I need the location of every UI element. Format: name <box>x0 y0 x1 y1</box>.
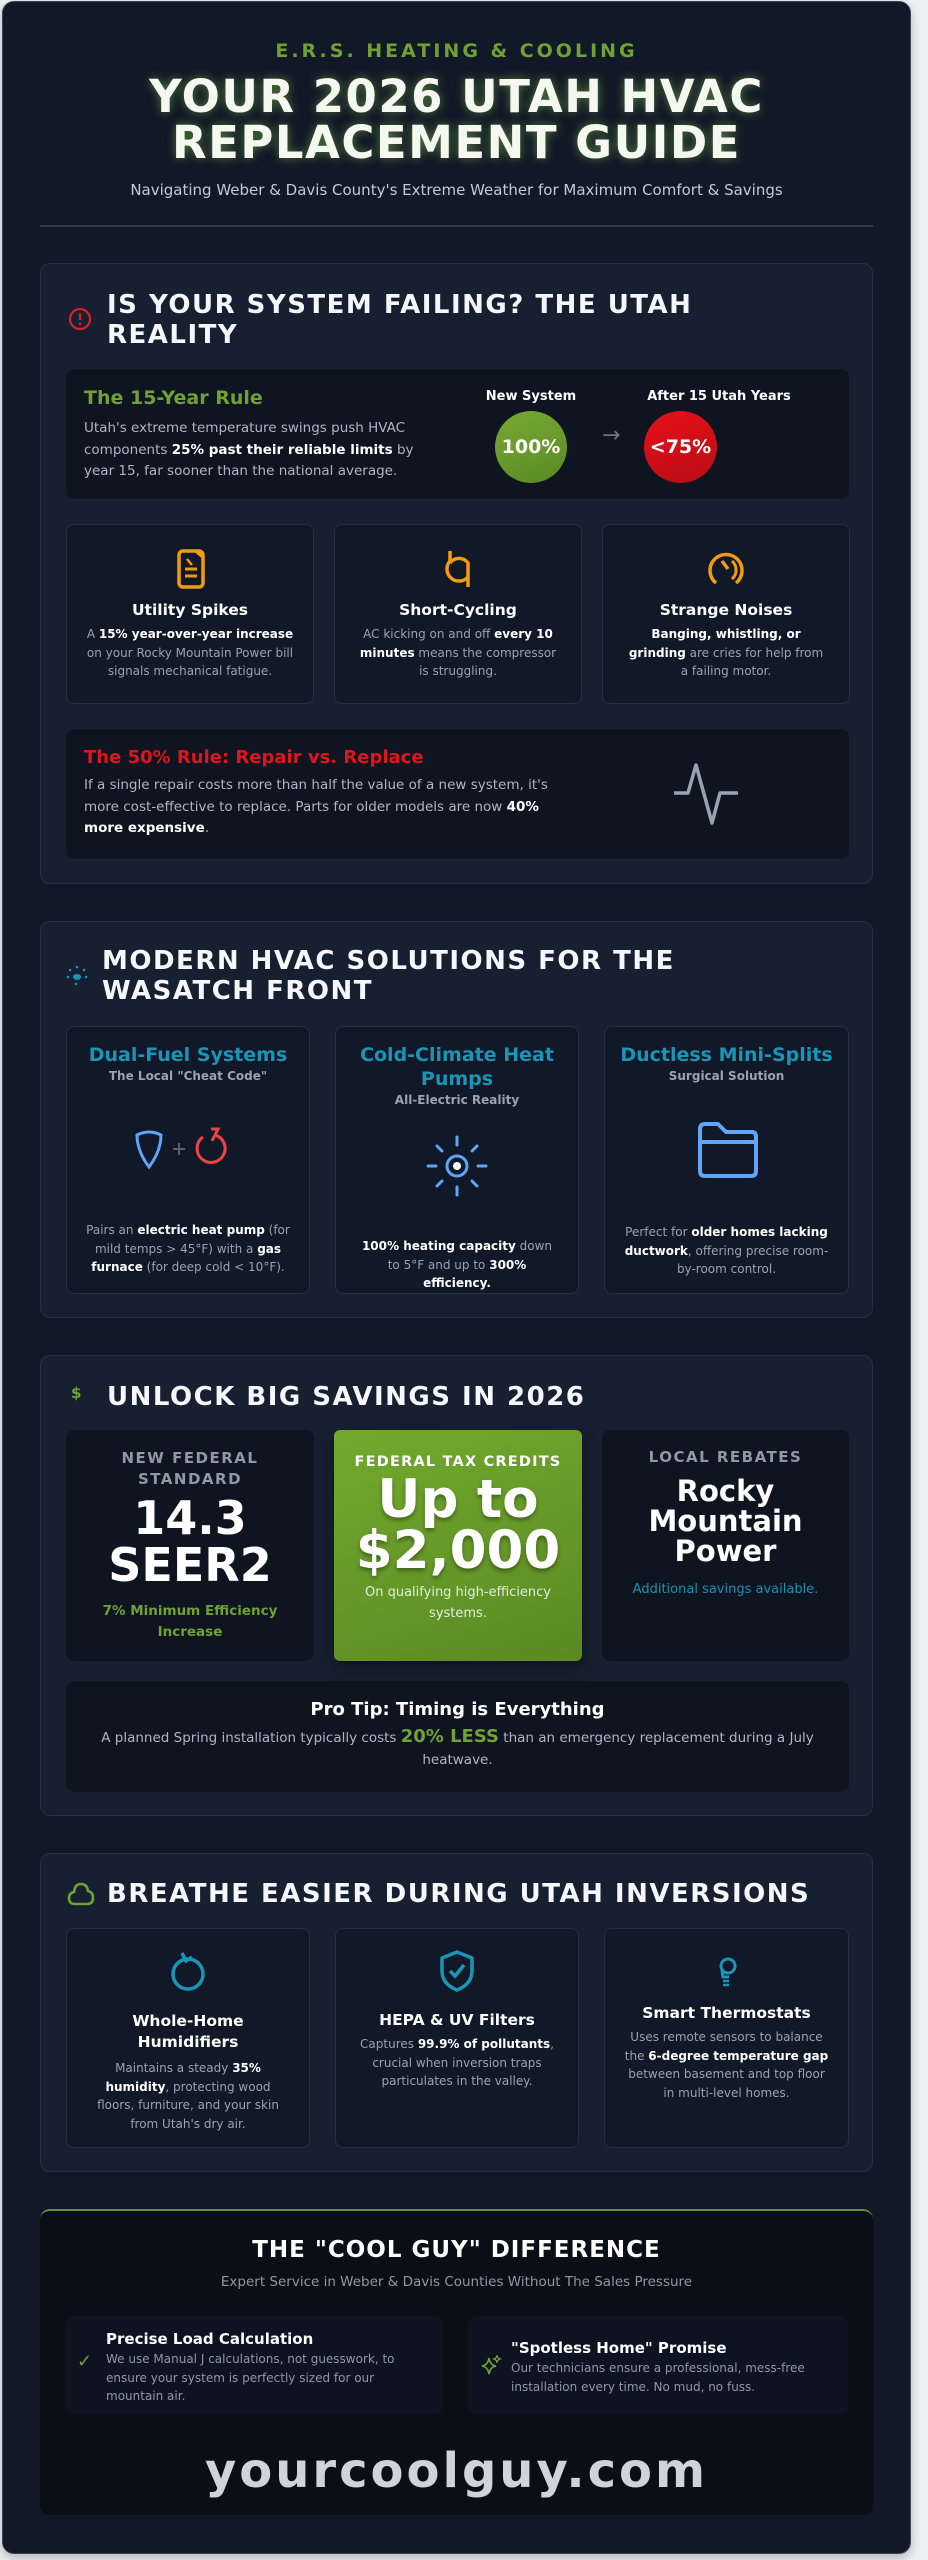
card: dual-fuel: The Local "Cheat Code" <box>109 1069 267 1083</box>
card: thermostats <box>604 1928 849 2148</box>
feature: load calculation: We use Manual J calculations, not guesswork, to ensure your system is perfectly sized for our mountain air. <box>106 2352 395 2403</box>
card: tax credits: On qualifying high-efficiency <box>365 1585 551 1600</box>
card: dual-fuel: Dual-Fuel Systems <box>89 1044 287 1066</box>
card: cold-climate heat pumps: Cold-Climate Heat Pumps <box>360 1044 554 1090</box>
card: dual-fuel <box>66 1026 310 1294</box>
50% rule box <box>66 729 849 859</box>
feature: spotless home <box>468 2316 848 2414</box>
card: strange noises <box>602 524 850 704</box>
card: HEPA: HEPA & UV Filters <box>379 2011 535 2029</box>
card: federal standard: NEW FEDERAL <box>122 1449 258 1467</box>
15-year rule box <box>66 369 849 499</box>
chart: after 15 years: <75% <box>650 436 711 458</box>
15-year rule box: Utah's extreme temperature swings push HVAC components 25% past their reliable limits by year 15, far sooner than the national average. <box>84 420 414 479</box>
card: cold-climate heat pumps <box>335 1026 579 1294</box>
card: federal standard: Increase <box>158 1624 222 1640</box>
card: tax credits <box>334 1430 582 1661</box>
panel: breathe easier <box>40 1853 873 2172</box>
panel: modern solutions <box>40 921 873 1318</box>
card: humidifiers: Whole-Home <box>132 2012 244 2030</box>
card: federal standard <box>66 1430 314 1661</box>
card: ductless: Surgical Solution <box>669 1069 784 1083</box>
website url: yourcoolguy.com <box>205 2443 708 2499</box>
card: ductless <box>604 1026 849 1294</box>
subtitle: Navigating Weber & Davis County's Extreme Weather for Maximum Comfort & Savings <box>130 181 783 199</box>
card: short-cycling: Short-Cycling <box>399 601 517 619</box>
title: YOUR 2026 UTAH HVAC <box>149 70 764 123</box>
panel: savings <box>40 1355 873 1816</box>
arrow: → <box>602 423 620 448</box>
card: thermostats: Uses remote sensors to balance the 6-degree temperature gap between basement and top floor in multi-level homes. <box>625 2030 828 2100</box>
card: HEPA: Captures 99.9% of pollutants, crucial when inversion traps particulates in the valley. <box>360 2037 554 2088</box>
pro tip: Pro Tip: Timing is Everything <box>310 1699 605 1720</box>
card: local rebates: Rocky <box>677 1474 774 1508</box>
card: federal standard: SEER2 <box>108 1538 272 1592</box>
card: utility spikes <box>66 524 314 704</box>
feature: spotless home: "Spotless Home" Promise <box>511 2339 726 2357</box>
50% rule box: The 50% Rule: Repair vs. Replace <box>84 747 424 768</box>
card: tax credits: systems. <box>429 1606 487 1621</box>
title: REPLACEMENT GUIDE <box>172 116 741 169</box>
chart: after 15 years <box>644 389 791 483</box>
icon: dollar: $ <box>71 1384 81 1402</box>
feature: load calculation: ✓ <box>77 2351 92 2372</box>
card: cold-climate heat pumps: 100% heating capacity down to 5°F and up to 300% efficiency. <box>362 1239 552 1290</box>
card: cold-climate heat pumps: All-Electric Reality <box>395 1093 519 1107</box>
chart: new system: New System <box>486 389 576 404</box>
feature: spotless home: Our technicians ensure a professional, mess-free installation every time. No mud, no fuss. <box>511 2361 805 2394</box>
card: local rebates: Mountain <box>648 1504 803 1538</box>
pro tip: A planned Spring installation typically costs 20% LESS than an emergency replacement during a July heatwave. <box>101 1726 814 1768</box>
header brand: E.R.S. HEATING & COOLING <box>275 40 638 62</box>
card: federal standard: 14.3 <box>133 1491 247 1545</box>
chart: after 15 years: After 15 Utah Years <box>647 389 791 404</box>
title <box>146 70 764 169</box>
card: federal standard: 7% Minimum Efficiency <box>103 1603 277 1619</box>
card: thermostats: Smart Thermostats <box>642 2004 811 2022</box>
card: utility spikes: Utility Spikes <box>132 601 248 619</box>
feature: load calculation: Precise Load Calculation <box>106 2330 313 2348</box>
icon: pulse <box>674 763 738 825</box>
footer subtitle: Expert Service in Weber & Davis Counties Without The Sales Pressure <box>221 2274 692 2290</box>
card: utility spikes: A 15% year-over-year increase on your Rocky Mountain Power bill signals mechanical fatigue. <box>87 627 293 678</box>
card: tax credits: $2,000 <box>356 1520 560 1581</box>
panel: is your system failing <box>40 263 873 884</box>
heading: UNLOCK BIG SAVINGS IN 2026 <box>107 1382 585 1412</box>
heading: BREATHE EASIER DURING UTAH INVERSIONS <box>107 1879 810 1909</box>
chart: new system <box>486 389 576 483</box>
card: humidifiers: Maintains a steady 35% humidity, protecting wood floors, furniture, and your skin from Utah's dry air. <box>97 2061 279 2130</box>
icon: sparkle <box>66 966 88 986</box>
heading: REALITY <box>107 320 238 350</box>
50% rule box: If a single repair costs more than half the value of a new system, it's more cost-effective to replace. Parts for older models are now 40% more expensive. <box>84 777 548 836</box>
card: local rebates: LOCAL REBATES <box>649 1448 802 1466</box>
heading <box>102 946 675 1006</box>
heading: WASATCH FRONT <box>102 976 373 1006</box>
card: humidifiers: Humidifiers <box>138 2033 238 2051</box>
card: tax credits: Up to <box>377 1469 539 1530</box>
card: ductless: Perfect for older homes lacking ductwork, offering precise room-by-room control. <box>625 1225 828 1276</box>
card: strange noises: Banging, whistling, or grinding are cries for help from a failing motor. <box>629 627 823 678</box>
card: HEPA <box>335 1928 579 2148</box>
card: tax credits: FEDERAL TAX CREDITS <box>355 1454 561 1470</box>
heading: MODERN HVAC SOLUTIONS FOR THE <box>102 946 675 976</box>
feature: load calculation <box>65 2316 443 2414</box>
pro tip <box>66 1681 849 1792</box>
icon: cloud <box>68 1882 94 1906</box>
card: local rebates: Additional savings available. <box>633 1582 818 1597</box>
card: humidifiers <box>66 1928 310 2148</box>
card: local rebates: Power <box>675 1534 776 1568</box>
card: short-cycling: AC kicking on and off every 10 minutes means the compressor is struggling. <box>360 627 556 678</box>
15-year rule box: The 15-Year Rule <box>84 387 263 409</box>
chart: new system: 100% <box>502 436 560 458</box>
footer panel: cool guy difference <box>40 2209 873 2515</box>
card: ductless: Ductless Mini-Splits <box>620 1044 833 1066</box>
card: federal standard: STANDARD <box>138 1470 242 1488</box>
heading <box>107 290 692 350</box>
card: strange noises: Strange Noises <box>660 601 792 619</box>
icon: alert <box>68 308 92 330</box>
card: dual-fuel: Pairs an electric heat pump (for mild temps > 45°F) with a gas furnace (for deep cold < 10°F). <box>86 1223 290 1274</box>
card: local rebates <box>602 1430 849 1661</box>
card: short-cycling <box>334 524 582 704</box>
heading: IS YOUR SYSTEM FAILING? THE UTAH <box>107 290 692 320</box>
footer title: THE "COOL GUY" DIFFERENCE <box>252 2237 661 2263</box>
